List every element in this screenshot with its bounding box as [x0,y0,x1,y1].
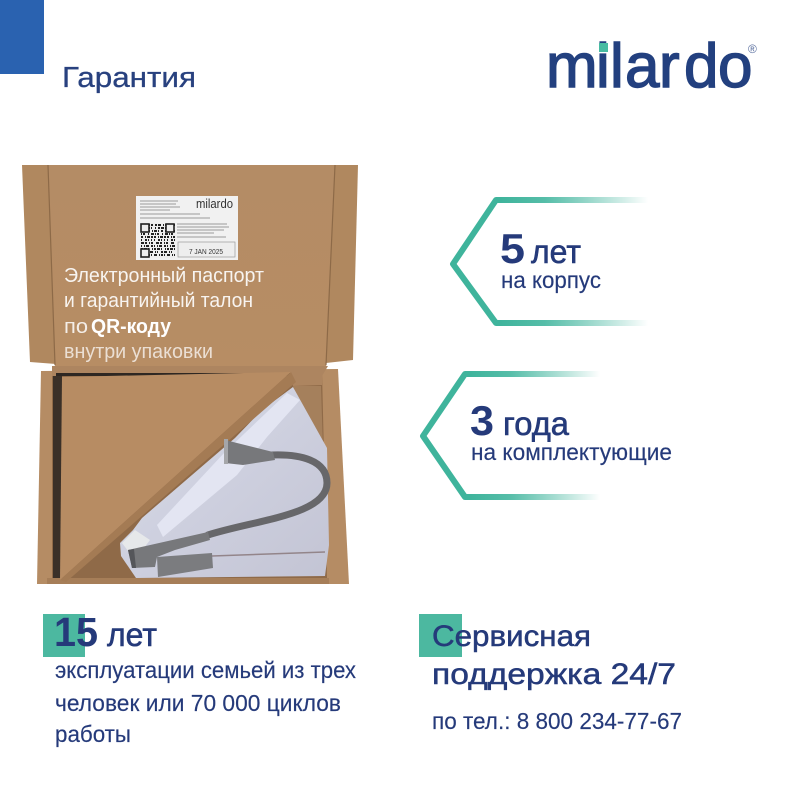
value: 5 [500,225,525,272]
date stamp: 7 JAN 2025 [189,249,223,256]
description: на корпус [501,267,601,293]
description: на комплектующие [471,439,672,465]
phone: по тел.: 8 800 234-77-67 [432,708,682,734]
chevron [453,200,648,323]
title: Гарантия [62,62,196,94]
chevron [423,374,600,497]
logo: milardo: ® [748,42,757,56]
badge: 3 years: года [503,405,570,442]
value: 15 [54,609,98,655]
block: service support [419,614,682,734]
block: 15 years: лет [107,616,157,653]
triangular insert [60,372,291,580]
faucet [128,439,327,577]
block: 15 years [43,609,356,747]
plastic bag [120,387,329,578]
box bottom [37,366,349,584]
accent square [43,614,85,657]
box caption: QR-коду [91,316,172,338]
box caption: и гарантийный талон [64,290,253,312]
badge: 3 years [423,374,672,497]
heading: Сервисная [432,620,591,653]
badge: 5 years [453,200,648,323]
box caption: Электронный паспорт [64,265,264,287]
box caption: внутри упаковки [64,341,213,363]
heading: поддержка 24/7 [432,658,676,691]
box caption: по [64,316,88,338]
description [55,657,356,747]
photo: open cardboard box [22,165,358,584]
QR code [140,223,175,258]
warranty label [136,196,238,260]
description: человек или 70 000 циклов [55,690,341,716]
label fine print [140,201,229,237]
logo: milardo: milardo [546,32,752,101]
description: эксплуатации семьей из трех [55,657,356,683]
accent square [419,614,462,657]
box caption [64,265,264,363]
value: 3 [470,397,494,444]
label logo: milardo [196,197,233,211]
badge: 5 years: лет [531,233,581,270]
box top flap [22,165,358,371]
heading [432,620,676,691]
corner accent [0,0,44,74]
description: работы [55,721,131,747]
